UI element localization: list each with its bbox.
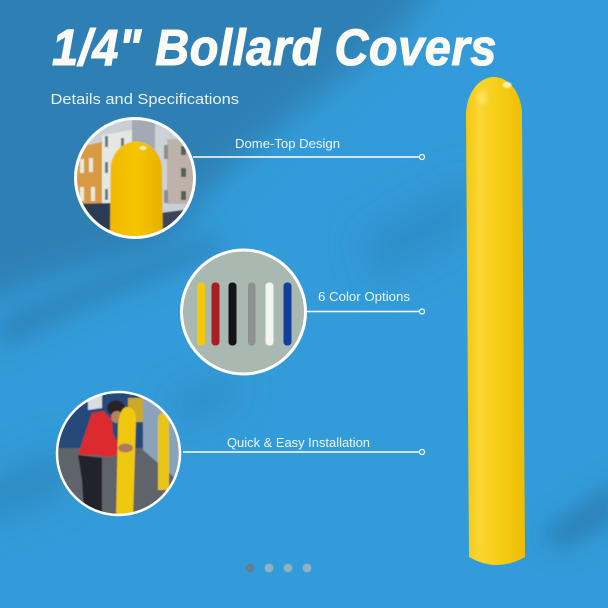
photo: person installing cover [55,390,185,518]
white cover [266,282,274,346]
connector line with end dot [193,154,424,160]
title: 1/4" Bollard Covers [52,20,496,76]
callout: dome-top design [72,115,424,241]
photo: six color swatches [182,250,306,374]
yellow cover [197,282,205,346]
gray cover [248,282,256,346]
callout: color options [182,250,424,374]
label: Quick & Easy Installation [227,436,370,450]
connector line with end dot [307,309,424,314]
carousel dots [246,564,312,572]
label: Dome-Top Design [235,137,340,151]
red cover [212,282,220,346]
large yellow bollard cover [466,77,525,565]
black cover [228,282,236,346]
callout: installation [55,390,424,518]
blue cover [284,282,292,346]
connector line with end dot [183,450,424,454]
photo: dome-top bollard in front of buildings [72,115,198,241]
subtitle: Details and Specifications [50,92,239,108]
label: 6 Color Options [318,290,410,304]
